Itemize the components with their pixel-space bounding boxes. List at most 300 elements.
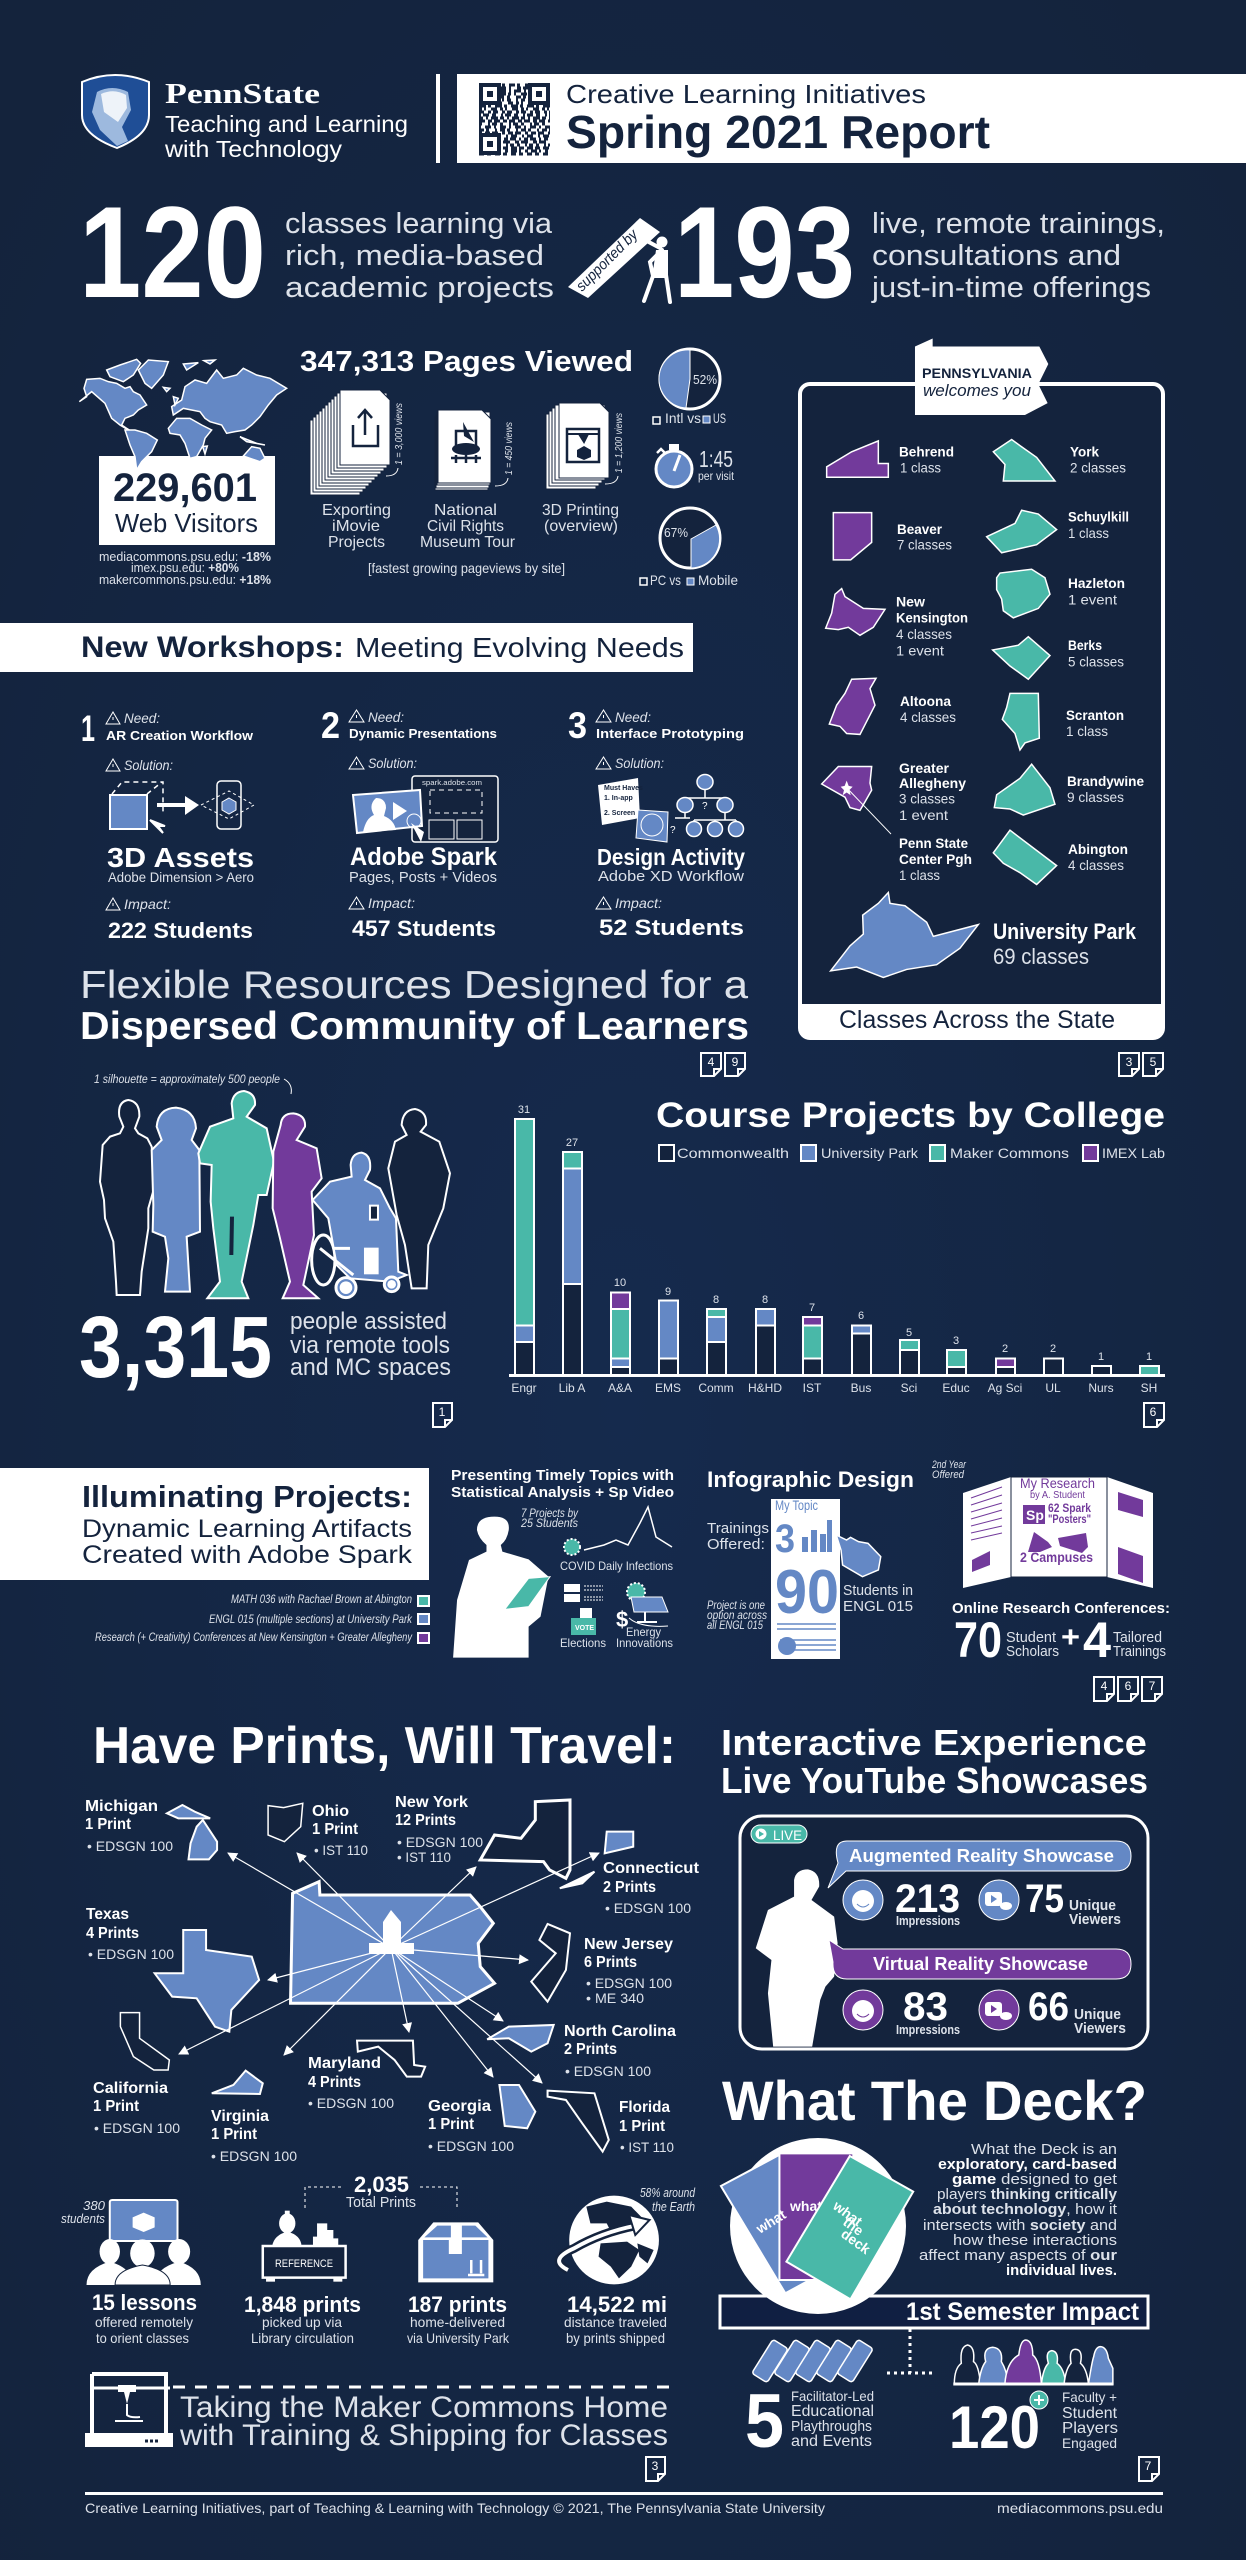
- panel: audience stats: [640, 349, 738, 588]
- stacked bar chart: 6: [858, 1310, 864, 1322]
- page labels: 3D Printing: [542, 502, 619, 519]
- icon: pointing hand: [836, 1535, 881, 1577]
- stacked bar chart: 8: [713, 1294, 719, 1306]
- panel: online research conferences: 2nd Year: [931, 1459, 967, 1471]
- panel: course projects by college: [509, 1096, 1165, 1395]
- workshop 1: 3D Assets: [107, 842, 254, 873]
- stacked bar chart: Nurs: [1088, 1381, 1114, 1395]
- stat: 15 lessons: to orient classes: [96, 2330, 189, 2346]
- page labels: National: [434, 502, 497, 519]
- campus labels: New: [896, 594, 925, 610]
- panel: timely topics: 7 Projects by: [521, 1506, 579, 1520]
- stat: 187 prints: home-delivered: [410, 2314, 505, 2330]
- panel: infographic design: all ENGL 015: [707, 1618, 763, 1632]
- card deck illustration: the: [840, 2213, 867, 2239]
- poster board: 2 Campuses: [1020, 1549, 1093, 1565]
- pie chart: international vs US: 52%: [693, 372, 717, 387]
- solution label: Solution:: [124, 757, 173, 773]
- conference stats: [954, 1612, 1166, 1668]
- panel: have prints will travel: [85, 1717, 700, 2164]
- stacked bar chart: 8: [762, 1294, 768, 1306]
- icons: elections: Elections: [560, 1636, 606, 1650]
- workshop 2: Adobe Spark: [350, 843, 497, 871]
- campus labels: 1 class: [899, 867, 940, 883]
- state labels: • EDSGN 100: [211, 2148, 297, 2164]
- icon: QR code: [479, 85, 550, 154]
- campus labels: Behrend: [899, 444, 954, 460]
- state labels: Texas: [86, 1906, 129, 1923]
- state shapes and Pennsylvania: [120, 1800, 633, 2152]
- deck description: about technology , how it: [933, 2201, 1118, 2218]
- stacked bar chart: Comm: [698, 1381, 734, 1395]
- campus labels: 2 classes: [1070, 460, 1126, 476]
- stacked bar chart: Bus: [851, 1381, 871, 1395]
- icon: globe with orbit arrow: [559, 2196, 659, 2284]
- stacked bar chart: 10: [614, 1277, 626, 1289]
- state labels: • IST 110: [314, 1842, 368, 1858]
- page labels: (overview): [544, 518, 618, 535]
- footer: mediacommons.psu.edu: [997, 2500, 1163, 2516]
- reference tag 4 6 7: 4: [1101, 1679, 1108, 1693]
- virtual reality bubble: [829, 1940, 1131, 1979]
- state labels: 1 Print: [85, 1816, 132, 1833]
- workshop 1: [81, 708, 254, 943]
- icon: shipping box: [418, 2222, 493, 2282]
- virtual reality stats: 66: [1028, 1985, 1069, 2029]
- stat: 187 prints: 187 prints: [408, 2292, 507, 2317]
- deck description: [919, 2141, 1118, 2279]
- campus labels: 1 class: [1068, 525, 1109, 541]
- stat: 120 classes: classes learning via: [285, 208, 553, 240]
- stacked bar chart: 5: [906, 1327, 912, 1339]
- stat: 15 lessons: students: [61, 2211, 105, 2226]
- virtual reality bubble: Virtual Reality Showcase: [873, 1954, 1088, 1974]
- icon: audience and tablet: [87, 2200, 201, 2285]
- stat: 1,848 prints: picked up via: [262, 2314, 342, 2330]
- icon: sticky notes and flow tree: [598, 774, 744, 842]
- panel: timely topics: 25 Students: [520, 1516, 578, 1530]
- need: Need:: [615, 709, 651, 725]
- stat: 14,522 miles: 58% around: [640, 2185, 696, 2200]
- workshop 3: Design Activity: [597, 844, 745, 870]
- route arrows: [179, 1853, 599, 2083]
- card deck illustration: what: [789, 2198, 822, 2214]
- workshop 2: [321, 705, 498, 941]
- visitor count: Web Visitors: [115, 508, 258, 538]
- panel: pages viewed: [300, 346, 633, 576]
- panel: infographic design: Offered:: [707, 1536, 765, 1553]
- state labels: [85, 1794, 700, 2164]
- stat: 5 playthroughs: Facilitator-Led: [791, 2388, 874, 2404]
- deck description: players thinking critically: [937, 2186, 1118, 2203]
- conference stats: Scholars: [1006, 1643, 1059, 1660]
- stat: 187 prints: [407, 2222, 510, 2346]
- campus labels: Altoona: [900, 693, 951, 709]
- campus labels: 1 event: [896, 642, 944, 658]
- icon: 3D asset to phone: [110, 781, 254, 833]
- live badge: [751, 1825, 807, 1843]
- stacked bar chart: 1: [1146, 1351, 1152, 1363]
- impact: 222 Students: [108, 918, 253, 943]
- stat: 120 players: [949, 2389, 1118, 2461]
- icon: page stack exporting iMovie: [310, 390, 405, 495]
- section banner: illuminating projects: [0, 1468, 429, 1580]
- need: [596, 709, 744, 741]
- panel: online research conferences: Online Research Conferences:: [952, 1600, 1170, 1617]
- pie chart: international vs US: [653, 349, 726, 426]
- need: [349, 709, 497, 741]
- stat: 15 lessons: [61, 2198, 201, 2346]
- project legend: ENGL 015 (multiple sections) at University Park: [209, 1612, 413, 1626]
- total prints: Total Prints: [346, 2194, 416, 2211]
- people count: people assisted: [290, 1308, 447, 1335]
- state labels: 1 Print: [619, 2118, 666, 2135]
- presenter silhouette: [756, 1869, 838, 2047]
- visitor count: [113, 466, 258, 538]
- reference tag 3 5: [1119, 1053, 1163, 1076]
- augmented reality stats: Impressions: [896, 1913, 960, 1928]
- campus labels: York: [1070, 444, 1099, 460]
- state labels: • EDSGN 100: [428, 2138, 514, 2154]
- icons: elections: [560, 1584, 606, 1650]
- logo wordmark: PennState: [165, 78, 320, 110]
- stat: 120 players: Players: [1062, 2420, 1118, 2437]
- logo wordmark: Teaching and Learning: [165, 111, 408, 137]
- virtual reality stats: Impressions: [896, 2022, 960, 2037]
- state labels: • EDSGN 100: [88, 1946, 174, 1962]
- augmented reality stats: 213: [895, 1877, 960, 1921]
- page labels: iMovie: [332, 518, 380, 535]
- need: Need:: [368, 709, 404, 725]
- state labels: • EDSGN 100: [586, 1975, 672, 1991]
- panel: timely topics: [451, 1467, 674, 1658]
- deck description: exploratory, card-based: [938, 2156, 1117, 2173]
- page labels: [fastest growing pageviews by site]: [368, 560, 565, 576]
- card deck illustration: deck: [838, 2225, 874, 2257]
- stat: 1,848 prints: REFERENCE: [275, 2258, 333, 2270]
- panel: people assisted: 1 silhouette = approximately 500 people: [94, 1072, 280, 1086]
- solution label: Solution:: [615, 755, 664, 771]
- reference tag 4 6 7: 7: [1149, 1679, 1156, 1693]
- callout: taking the maker commons home: with Training & Shipping for Classes: [179, 2419, 668, 2452]
- reference tag 7: 7: [1145, 2459, 1152, 2473]
- legend: IMEX Lab: [1102, 1145, 1165, 1161]
- stat: 120 players: Engaged: [1062, 2435, 1117, 2451]
- site growth text: makercommons.psu.edu: +18%: [99, 572, 271, 587]
- reference tag 1: [433, 1403, 452, 1427]
- state labels: 1 Print: [428, 2116, 475, 2133]
- icon: page stack 3D printing: [546, 403, 625, 489]
- campus labels: [896, 444, 1144, 969]
- stacked bar chart: 7: [809, 1302, 815, 1314]
- stat: 193 trainings: live, remote trainings,: [872, 208, 1165, 240]
- impact: Impact:: [368, 895, 415, 911]
- reference tag 4 6 7: [1094, 1677, 1162, 1701]
- panel: classes across the state: [800, 338, 1163, 1038]
- impact: 52 Students: [599, 915, 744, 940]
- pie chart: PC vs mobile: Mobile: [698, 572, 738, 588]
- poster board: [963, 1475, 1153, 1588]
- panel: live youtube showcases: Live YouTube Showcases: [721, 1760, 1148, 1801]
- icon: page stack civil rights tour: [435, 410, 515, 490]
- people count: [79, 1299, 451, 1396]
- stat: 120 players: Faculty +: [1062, 2389, 1117, 2405]
- stat: 193 trainings: [674, 179, 1165, 325]
- impact: [106, 896, 253, 943]
- line chart: covid infections: [560, 1507, 673, 1573]
- stat: 193 trainings: 193: [674, 179, 855, 325]
- pie chart: international vs US: US: [713, 410, 726, 426]
- state labels: 1 Print: [93, 2098, 140, 2115]
- campus labels: Penn State: [899, 835, 968, 851]
- stacked bar chart: Educ: [942, 1381, 970, 1395]
- campus labels: Allegheny: [899, 775, 966, 791]
- conference stats: Trainings: [1113, 1643, 1166, 1660]
- line chart: covid infections: COVID Daily Infections: [560, 1559, 673, 1573]
- campus labels: Brandywine: [1067, 773, 1144, 789]
- workshop 3: 3: [568, 705, 587, 746]
- stat: 14,522 miles: distance traveled: [564, 2314, 667, 2330]
- stat: 5 playthroughs: [745, 2379, 874, 2464]
- icon: sticky notes and flow tree: Must Haves: [604, 785, 643, 792]
- panel: what the deck: [720, 2069, 1148, 2464]
- total prints: [305, 2172, 457, 2211]
- panel: people assisted: [79, 1072, 451, 1396]
- panel: live youtube showcases: Interactive Experience: [721, 1722, 1147, 1763]
- campus labels: Hazleton: [1068, 575, 1125, 591]
- augmented reality stats: Viewers: [1069, 1911, 1121, 1928]
- workshop 1: Adobe Dimension > Aero: [108, 869, 254, 885]
- reference tag 4 9: [701, 1053, 745, 1076]
- solution label: Solution:: [368, 755, 417, 771]
- Pennsylvania welcome sign: [915, 338, 1048, 415]
- panel: infographic design: Students in: [843, 1582, 913, 1599]
- stacked bar chart: H&HD: [748, 1381, 782, 1395]
- legend: University Park: [821, 1145, 919, 1161]
- section banner: new workshops: New Workshops:: [81, 631, 344, 664]
- impact: Impact:: [615, 895, 662, 911]
- state labels: 2 Prints: [564, 2041, 617, 2058]
- poster: 90: [775, 1558, 839, 1627]
- stat: 14,522 miles: [559, 2185, 696, 2346]
- stat: 120 classes: [79, 179, 554, 325]
- page labels: Museum Tour: [420, 534, 516, 551]
- visit duration: per visit: [698, 469, 735, 483]
- augmented reality bubble: [828, 1841, 1131, 1888]
- campus labels: University Park: [993, 919, 1137, 944]
- stat: 5 playthroughs: and Events: [791, 2433, 872, 2450]
- stacked bar chart: IST: [803, 1381, 822, 1395]
- campus labels: Kensington: [896, 610, 968, 626]
- title banner: Creative Learning Initiatives: [566, 79, 926, 109]
- poster: My Topic: [775, 1497, 818, 1513]
- virtual reality stats: 83: [903, 1985, 948, 2029]
- campus labels: 3 classes: [899, 790, 955, 806]
- virtual reality stats: [843, 1985, 1126, 2037]
- callout: taking the maker commons home: Taking the Maker Commons Home: [180, 2391, 668, 2424]
- panel: live youtube showcases: [721, 1722, 1148, 2049]
- need: Interface Prototyping: [596, 726, 744, 741]
- stat: 120 players: Student: [1062, 2405, 1118, 2422]
- stat: 14,522 miles: the Earth: [652, 2199, 695, 2214]
- icon: sticky notes and flow tree: 2. Screen: [604, 810, 635, 817]
- workshop 2: Pages, Posts + Videos: [349, 869, 497, 886]
- state labels: Florida: [619, 2099, 670, 2116]
- campus labels: 9 classes: [1067, 789, 1124, 805]
- impact box: 1st Semester Impact: [906, 2298, 1140, 2326]
- state labels: Ohio: [312, 1803, 349, 1820]
- stacked bar chart: 31: [518, 1104, 530, 1116]
- stacked bar chart: 2: [1002, 1343, 1008, 1355]
- icon: capitol: [369, 1910, 414, 1954]
- augmented reality bubble: Augmented Reality Showcase: [849, 1846, 1114, 1866]
- heading: flexible resources: Flexible Resources Designed for a: [80, 964, 748, 1007]
- campus labels: Berks: [1068, 637, 1102, 653]
- panel: timely topics: Statistical Analysis + Sp Video: [451, 1484, 674, 1501]
- visit duration: [698, 446, 735, 483]
- campus labels: Center Pgh: [899, 851, 972, 867]
- pie chart: PC vs mobile: 67%: [664, 525, 688, 540]
- impact: Impact:: [124, 896, 171, 912]
- panel: timely topics: Presenting Timely Topics with: [451, 1467, 674, 1484]
- deck description: game designed to get: [952, 2171, 1118, 2188]
- header: [82, 74, 1246, 163]
- heading: 347,313 Pages Viewed: [300, 346, 633, 378]
- stat: 15 lessons: offered remotely: [95, 2314, 193, 2330]
- stat: 15 lessons: 15 lessons: [92, 2290, 197, 2315]
- stacked bar chart: Engr: [511, 1381, 537, 1395]
- workshop 1: 1: [81, 708, 95, 749]
- impact: [349, 895, 496, 941]
- campus labels: 4 classes: [896, 626, 952, 642]
- presenter silhouette: [453, 1517, 550, 1658]
- icon: page stack exporting iMovie: 1 = 3,000 views: [394, 403, 405, 465]
- panel: online research conferences: Offered: [932, 1469, 965, 1481]
- title banner: Spring 2021 Report: [566, 106, 990, 158]
- project legend: Research (+ Creativity) Conferences at New Kensington + Greater Allegheny: [95, 1630, 413, 1644]
- campus labels: 1 class: [900, 460, 941, 476]
- panel: infographic design: option across: [707, 1608, 767, 1622]
- callout: taking the maker commons home: [85, 2374, 669, 2452]
- reference tag 3: [646, 2457, 665, 2481]
- world map: [79, 359, 287, 470]
- campus labels: 5 classes: [1068, 654, 1124, 670]
- icon: tickets: [752, 2339, 873, 2383]
- stat: 14,522 miles: by prints shipped: [566, 2330, 665, 2346]
- icon: Spark browser and video: spark.adobe.com: [422, 780, 482, 787]
- state labels: Virginia: [211, 2108, 269, 2125]
- panel: classes across the state: Classes Across the State: [839, 1006, 1115, 1034]
- augmented reality stats: Unique: [1069, 1897, 1116, 1914]
- campus labels: Schuylkill: [1068, 508, 1129, 524]
- panel: course projects by college: Course Projects by College: [656, 1096, 1165, 1135]
- deck description: intersects with society and: [923, 2217, 1117, 2234]
- icon: stopwatch: [656, 444, 692, 487]
- state labels: New Jersey: [584, 1936, 673, 1953]
- workshop 2: 2: [321, 705, 340, 746]
- icons: energy innovations: $: [616, 1607, 628, 1632]
- people count: and MC spaces: [290, 1354, 451, 1381]
- campus labels: 69 classes: [993, 944, 1089, 969]
- section banner: illuminating projects: Dynamic Learning Artifacts: [82, 1515, 412, 1543]
- panel: infographic design: Infographic Design: [707, 1467, 914, 1492]
- stat: 120 classes: academic projects: [285, 272, 554, 304]
- reference tag 4 9: 9: [732, 1055, 739, 1069]
- Pennsylvania welcome sign: PENNSYLVANIA: [922, 365, 1032, 381]
- stat: 14,522 miles: 14,522 mi: [567, 2292, 667, 2317]
- reference tag 4 9: 4: [708, 1055, 715, 1069]
- state labels: Georgia: [428, 2098, 491, 2115]
- title banner: [457, 74, 1246, 163]
- footer: [85, 2492, 1163, 2516]
- workshop 3: [568, 705, 745, 940]
- section banner: new workshops: [0, 623, 693, 672]
- reference tag 7: [1139, 2457, 1159, 2481]
- logo wordmark: [164, 78, 408, 162]
- reference tag 3: 3: [652, 2459, 659, 2473]
- icon: sticky notes and flow tree: ?: [702, 801, 708, 812]
- panel: online research conferences: [931, 1459, 1170, 1668]
- stat: 120 classes: rich, media-based: [285, 240, 544, 272]
- icon: sticky notes and flow tree: ?: [670, 825, 676, 836]
- icon: page stack civil rights tour: 1 = 450 views: [504, 422, 515, 475]
- state labels: • EDSGN 100: [94, 2120, 180, 2136]
- stacked bar chart: SH: [1141, 1381, 1157, 1395]
- pie chart: PC vs mobile: [640, 508, 738, 588]
- state labels: New York: [395, 1794, 468, 1811]
- panel: web visitors: [79, 359, 287, 587]
- live badge: LIVE: [773, 1827, 802, 1843]
- state labels: Michigan: [85, 1798, 158, 1815]
- icon: Penn State shield logo: [82, 75, 149, 148]
- section banner: illuminating projects: Illuminating Projects:: [82, 1479, 412, 1514]
- deck description: affect many aspects of our: [919, 2247, 1117, 2264]
- icon: reference desk: [263, 2211, 346, 2282]
- campus labels: 1 event: [899, 807, 948, 823]
- state labels: Connecticut: [603, 1860, 700, 1877]
- augmented reality stats: 75: [1025, 1877, 1064, 1921]
- deck description: how these interactions: [953, 2232, 1117, 2249]
- reference tag 6: [1144, 1403, 1164, 1427]
- state labels: California: [93, 2080, 168, 2097]
- conference stats: Tailored: [1113, 1629, 1162, 1646]
- stacked bar chart: 2: [1050, 1343, 1056, 1355]
- impact box: [720, 2296, 1148, 2328]
- people count: via remote tools: [290, 1332, 450, 1359]
- conference stats: 70: [954, 1612, 1002, 1668]
- icon: sticky notes and flow tree: 1. In-app: [604, 795, 633, 802]
- campus labels: Greater: [899, 760, 950, 776]
- need: AR Creation Workflow: [106, 728, 254, 743]
- stat: 5 playthroughs: 5: [745, 2379, 784, 2464]
- state labels: North Carolina: [564, 2023, 676, 2040]
- stacked bar chart: EMS: [655, 1381, 681, 1395]
- visit duration: 1:45: [699, 446, 733, 472]
- reference tag 1: 1: [439, 1405, 446, 1419]
- state labels: • EDSGN 100: [308, 2095, 394, 2111]
- people count: 3,315: [79, 1299, 272, 1396]
- state labels: 12 Prints: [395, 1812, 456, 1829]
- reference tag 3 5: 5: [1150, 1055, 1157, 1069]
- campus labels: 1 class: [1066, 723, 1108, 739]
- panel: infographic design: [707, 1467, 914, 1659]
- legend: Commonwealth: [677, 1145, 789, 1161]
- stacked bar chart: 27: [566, 1137, 578, 1149]
- state labels: 4 Prints: [86, 1925, 139, 1942]
- stacked bar chart: 3: [953, 1335, 959, 1347]
- augmented reality stats: [843, 1877, 1121, 1928]
- state labels: • ME 340: [586, 1990, 644, 2006]
